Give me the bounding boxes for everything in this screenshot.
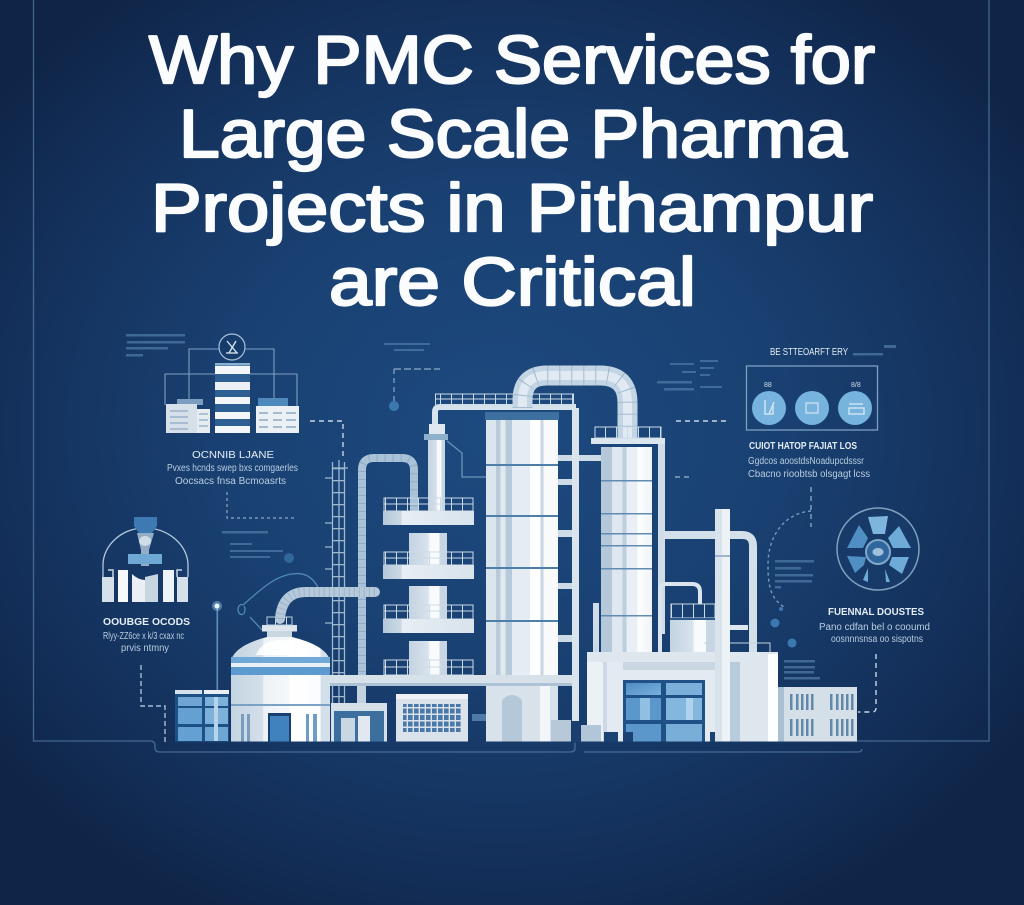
connector frame lines — [165, 349, 297, 406]
label: OOUBGE OCODS — [103, 616, 190, 628]
description line 2: oosnnnsnsa oo sispotns — [831, 634, 923, 645]
stack of floors — [215, 363, 250, 433]
vent building — [396, 694, 486, 742]
small labels — [764, 382, 861, 389]
panel: left top org structure — [165, 334, 299, 487]
tall chimney — [715, 509, 748, 742]
label: FUENNAL DOUSTES — [828, 606, 924, 618]
icon: circled tool — [219, 334, 245, 360]
panel: right dial icon — [819, 508, 930, 645]
title — [149, 22, 875, 320]
top railing — [436, 394, 574, 405]
description line 1: Ggdcos aoostdsNoadupcdsssr — [748, 456, 865, 467]
description line 2: prvis ntmny — [121, 643, 169, 654]
label: OCNNIB LJANE — [192, 449, 274, 461]
right block — [256, 398, 299, 433]
heading: BE STTEOARFT ERY — [770, 346, 848, 358]
icon: segmented dial — [837, 508, 919, 590]
thin vertical pipe — [572, 408, 579, 722]
description line 1: Rlyy-ZZ6ce x k/3 cxax nc — [103, 631, 184, 642]
small pump house — [331, 686, 387, 742]
icon: reactor under dome — [102, 517, 188, 602]
large overhead ribbed pipe — [522, 376, 628, 438]
description line 1: Pvxes hcnds swep bxs comgaerles — [167, 463, 298, 474]
faint annotation lines — [126, 334, 896, 680]
ribbed loop pipe — [362, 458, 414, 680]
ribbed tank pipe — [280, 592, 375, 619]
horizontal main pipe — [330, 675, 601, 742]
equipment tank on base — [660, 584, 715, 652]
left block — [166, 399, 210, 433]
left glass building — [175, 690, 229, 742]
base building — [587, 643, 778, 742]
description line 2: Cbacno rioobtsb olsgagt lcss — [748, 469, 870, 480]
storage tank — [231, 617, 330, 742]
icon: circles — [752, 391, 872, 425]
label: CUIOT HATOP FAJIAT LOS — [749, 440, 857, 452]
description line 1: Pano cdfan bel o cooumd — [819, 622, 930, 633]
description line 2: Oocsacs fnsa Bcmoasrts — [175, 476, 286, 487]
platforms with railings — [383, 498, 474, 676]
title: Projects in Pithampur — [151, 170, 873, 246]
large window — [623, 680, 705, 742]
title: are Critical — [329, 244, 696, 320]
chimney pipe on right — [664, 535, 753, 652]
right annex — [778, 687, 857, 742]
signal pole — [212, 601, 222, 691]
panel: left lower dome icon — [102, 517, 190, 654]
dark plinths — [604, 732, 730, 742]
metrics frame — [746, 366, 878, 430]
upper process column — [424, 407, 576, 512]
right column — [591, 427, 665, 653]
arc annotation over tank — [238, 574, 318, 630]
annotation dots — [389, 401, 796, 648]
lattice tower — [325, 460, 348, 742]
blueprint frame — [34, 0, 989, 752]
dashed connectors — [141, 369, 876, 742]
panel: right top metrics box — [746, 346, 878, 480]
small labels: 88 — [764, 382, 772, 389]
small labels: 8/8 — [851, 382, 861, 389]
ground shadow — [175, 742, 857, 743]
main column — [485, 412, 559, 742]
cross links between columns — [558, 455, 602, 642]
plant illustration — [175, 376, 857, 742]
title: Large Scale Pharma — [179, 96, 847, 172]
title: Why PMC Services for — [149, 22, 875, 98]
